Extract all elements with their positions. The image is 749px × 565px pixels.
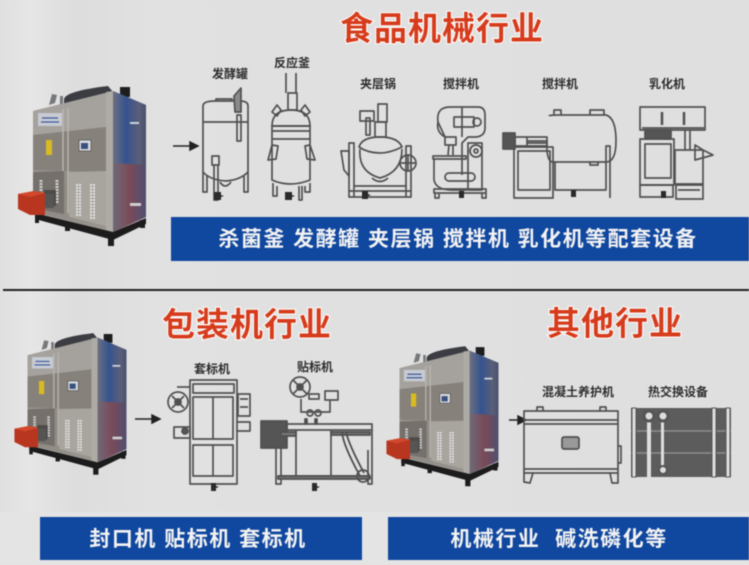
- boiler: other industries: [386, 346, 498, 486]
- mixer: [433, 107, 486, 198]
- label applicator: [261, 377, 372, 491]
- sleeve labeler label: 套标机: [194, 361, 230, 376]
- mixer label: 搅拌机: [443, 76, 479, 91]
- boiler: food machinery: [18, 86, 146, 246]
- jacketed kettle: [341, 104, 416, 199]
- banner: packaging: [40, 517, 362, 560]
- fermenter label: 发酵罐: [212, 66, 248, 81]
- banner: food machinery: 杀菌釜 发酵罐 夹层锅 搅拌机 乳化机等配套设备: [218, 228, 698, 251]
- banner: food machinery: [171, 217, 749, 261]
- heat exchanger label: 热交换设备: [648, 384, 708, 399]
- jacketed kettle label: 夹层锅: [360, 76, 396, 91]
- boiler: packaging: [14, 333, 126, 475]
- emulsifier: [640, 107, 713, 199]
- fermenter: [203, 88, 248, 200]
- concrete curing machine label: 混凝土养护机: [542, 384, 614, 399]
- concrete curing machine: [524, 407, 621, 483]
- emulsifier label: 乳化机: [649, 76, 685, 91]
- arrow: other industries: [509, 416, 526, 424]
- horizontal mixer: [503, 110, 616, 198]
- label applicator label: 贴标机: [297, 359, 333, 374]
- title: food machinery: 食品机械行业: [340, 10, 544, 47]
- divider: [3, 289, 749, 291]
- horizontal mixer label: 搅拌机: [542, 76, 578, 91]
- reactor label: 反应釜: [274, 55, 310, 70]
- title: other: 其他行业: [547, 305, 683, 342]
- banner: packaging: 封口机 贴标机 套标机: [89, 528, 307, 551]
- banner: other industries: [388, 517, 749, 560]
- reactor: [268, 73, 315, 200]
- sleeve labeler: [168, 380, 250, 491]
- title: packaging: 包装机行业: [162, 306, 332, 343]
- heat exchanger: [631, 408, 731, 477]
- arrow: food machinery: [173, 142, 198, 150]
- banner: other industries: 机械行业 碱洗磷化等: [450, 528, 668, 551]
- arrow: packaging: [135, 415, 160, 423]
